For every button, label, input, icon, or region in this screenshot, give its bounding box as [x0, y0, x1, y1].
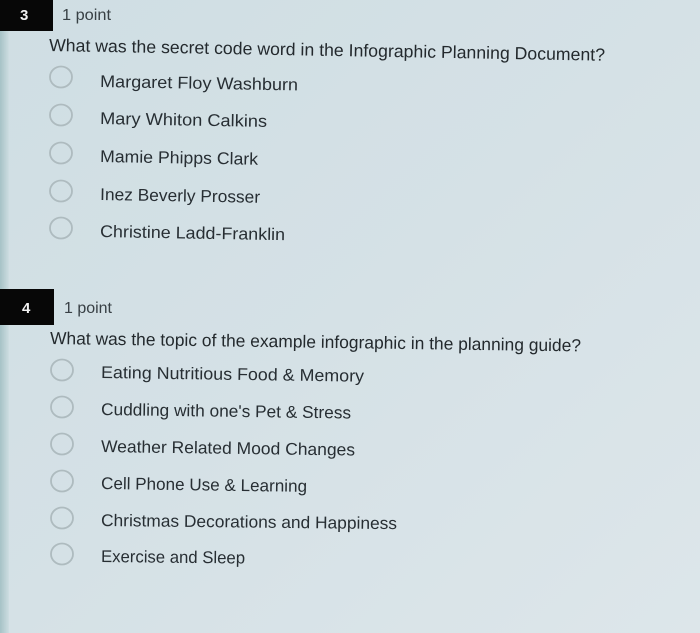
option: Cuddling with one's Pet and Stress: Cuddling with one's Pet & Stress [101, 400, 351, 422]
option: Exercise and Sleep: Exercise and Sleep [101, 547, 245, 568]
number badge 4 [0, 289, 54, 325]
option: Christine Ladd-Franklin: Christine Ladd-Franklin [100, 222, 285, 244]
option: Inez Beverly Prosser: Inez Beverly Prosser [100, 185, 261, 207]
option: Weather Related Mood Changes: Weather Related Mood Changes [101, 437, 355, 460]
option: Christine Ladd-Franklin [50, 218, 285, 244]
number badge 3: 3 [20, 7, 28, 24]
option: Mamie Phipps Clark [50, 142, 259, 169]
option: Margaret Floy Washburn [50, 66, 298, 94]
question 4 panel [0, 289, 581, 568]
option: Inez Beverly Prosser [50, 180, 261, 207]
question 4 text: What was the topic of the example infographic in the planning guide? [50, 328, 581, 355]
question 3 text: What was the secret code word in the Infographic Planning Document? [49, 35, 605, 65]
option: Margaret Floy Washburn: Margaret Floy Washburn [100, 72, 298, 94]
option: Mary Whiton Calkins [50, 104, 267, 131]
number badge 4: 4 [22, 300, 31, 317]
option: Cell Phone Use and Learning [51, 470, 307, 496]
options question 4 [51, 360, 397, 568]
number badge 3 [0, 0, 53, 31]
options question 3 [50, 66, 298, 244]
question 3 panel [0, 0, 605, 244]
points label 4: 1 point [64, 300, 113, 317]
option: Christmas Decorations and Happiness: Christmas Decorations and Happiness [101, 511, 397, 533]
option: Eating Nutritious Food and Memory: Eating Nutritious Food & Memory [101, 363, 365, 386]
option: Mamie Phipps Clark: Mamie Phipps Clark [100, 147, 259, 169]
option: Mary Whiton Calkins: Mary Whiton Calkins [100, 109, 267, 131]
option: Exercise and Sleep [51, 544, 245, 568]
points label 3: 1 point [62, 7, 112, 24]
option: Eating Nutritious Food and Memory [51, 360, 365, 386]
option: Cell Phone Use and Learning: Cell Phone Use & Learning [101, 474, 307, 496]
